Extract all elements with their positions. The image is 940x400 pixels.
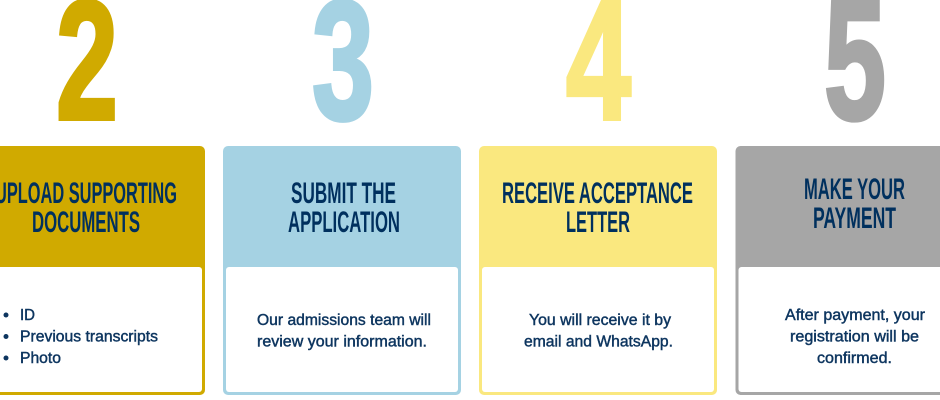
panel: receive acceptance letter: [479, 146, 717, 395]
text: email and WhatsApp: You will receive it by: [529, 312, 671, 329]
text: admissions review: review your information.: [257, 334, 427, 350]
text: registration confirmed: After payment, your: [785, 307, 925, 324]
text: registration confirmed: [785, 307, 925, 367]
heading: submit the application: [288, 177, 400, 239]
heading: upload supporting documents: UPLOAD SUPPORTING: [0, 177, 177, 210]
list: required documents: [4, 307, 158, 367]
step 3 column: [223, 0, 461, 395]
list: required documents: ID: [20, 307, 35, 324]
panel: make your payment: [736, 146, 940, 395]
text: registration confirmed: confirmed.: [817, 350, 892, 367]
heading: upload supporting documents: DOCUMENTS: [32, 206, 140, 239]
text: registration confirmed: registration will be: [790, 328, 919, 346]
heading: receive acceptance letter: [502, 177, 693, 239]
heading: make your payment: [804, 173, 905, 235]
heading: upload supporting documents: [0, 177, 177, 239]
step 4 column: [479, 0, 717, 395]
text: admissions review: [257, 312, 431, 350]
list: required documents: Previous transcripts: [20, 328, 158, 346]
list: required documents: Photo: [20, 350, 61, 367]
panel: upload supporting documents: [0, 146, 205, 395]
heading: submit the application: APPLICATION: [288, 206, 400, 239]
heading: receive acceptance letter: RECEIVE ACCEPTANCE: [502, 177, 693, 210]
text: email and WhatsApp: [524, 312, 673, 350]
step 2 column: [0, 0, 205, 395]
text: admissions review: Our admissions team will: [257, 312, 431, 329]
heading: submit the application: SUBMIT THE: [291, 177, 396, 210]
text: email and WhatsApp: email and WhatsApp.: [524, 334, 673, 350]
panel: submit the application: [223, 146, 461, 395]
heading: receive acceptance letter: LETTER: [566, 206, 630, 239]
step 5 column: [736, 0, 940, 395]
